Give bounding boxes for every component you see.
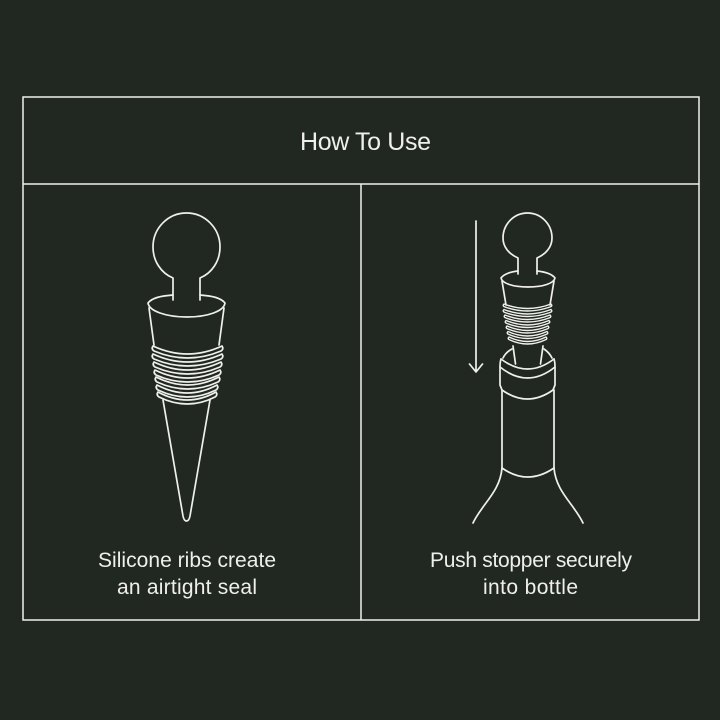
caption: silicone ribs: an airtight seal bbox=[117, 576, 257, 599]
caption: push stopper: into bottle bbox=[483, 576, 578, 599]
icon: wine stopper bbox=[148, 213, 225, 521]
caption: push stopper: Push stopper securely bbox=[430, 549, 632, 572]
title: How To Use bbox=[300, 128, 431, 156]
icon: stopper entering bottle bbox=[473, 213, 583, 523]
frame: how to use table bbox=[23, 97, 699, 620]
panel: push stopper bbox=[430, 213, 632, 599]
caption: silicone ribs: Silicone ribs create bbox=[98, 549, 276, 572]
panel: silicone ribs bbox=[98, 213, 276, 599]
arrow: push down bbox=[470, 221, 482, 372]
